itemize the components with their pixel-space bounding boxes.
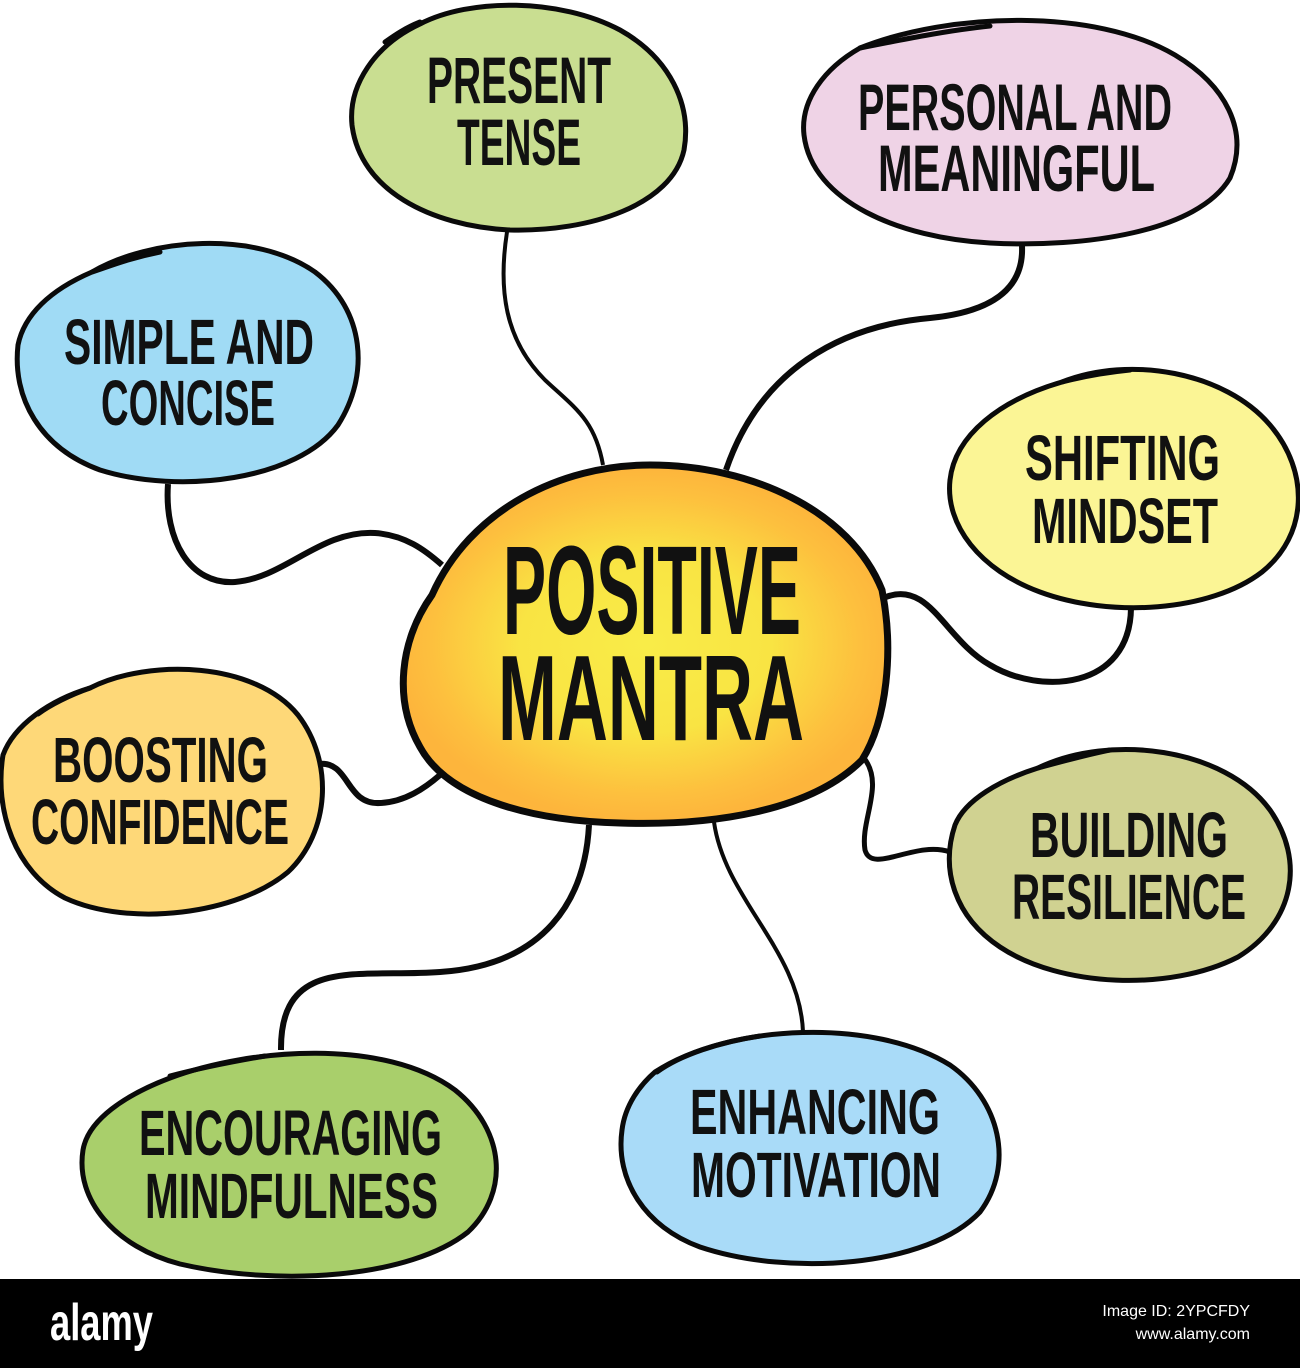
logo: alamy: alamy	[50, 1294, 153, 1352]
connector: enhancing motivation	[714, 822, 803, 1032]
node: boosting confidence	[1, 669, 322, 914]
node: personal and meaningful	[804, 20, 1237, 244]
label: boosting confidence: CONFIDENCE	[31, 786, 289, 858]
connector: simple and concise	[168, 484, 442, 582]
label: encouraging mindfulness: ENCOURAGING	[139, 1097, 442, 1169]
connector: personal and meaningful	[726, 246, 1022, 470]
label: encouraging mindfulness	[139, 1097, 442, 1232]
node: encouraging mindfulness	[82, 1053, 496, 1276]
connector: building resilience	[864, 758, 950, 859]
node: shifting mindset	[950, 369, 1298, 608]
node: enhancing motivation	[621, 1032, 999, 1264]
node: present tense	[352, 5, 686, 230]
image id: Image ID: 2YPCFDY	[1102, 1303, 1250, 1320]
label: simple and concise: SIMPLE AND	[64, 306, 314, 378]
label: encouraging mindfulness: MINDFULNESS	[145, 1160, 438, 1232]
label: positive mantra	[498, 520, 804, 766]
label: simple and concise	[64, 306, 314, 439]
connector: boosting confidence	[318, 764, 440, 803]
node: building resilience	[949, 749, 1290, 980]
label: positive mantra: POSITIVE	[503, 520, 801, 661]
website: www.alamy.com	[1135, 1326, 1250, 1343]
label: enhancing motivation: ENHANCING	[690, 1076, 940, 1148]
label: personal and meaningful	[858, 70, 1172, 205]
label: boosting confidence: BOOSTING	[53, 724, 268, 796]
label: simple and concise: CONCISE	[101, 367, 275, 439]
label: present tense	[427, 43, 611, 179]
connector: present tense	[504, 232, 603, 465]
label: present tense: TENSE	[457, 105, 581, 179]
footer bar	[0, 1279, 1300, 1368]
label: present tense: PRESENT	[427, 43, 611, 117]
connector: shifting mindset	[886, 594, 1131, 682]
connector: encouraging mindfulness	[281, 825, 589, 1050]
label: positive mantra: MANTRA	[498, 630, 804, 766]
node: center positive mantra	[403, 465, 888, 823]
node: simple and concise	[17, 243, 358, 482]
label: enhancing motivation: MOTIVATION	[691, 1139, 941, 1211]
label: boosting confidence	[31, 724, 289, 858]
label: enhancing motivation	[690, 1076, 941, 1211]
label: shifting mindset	[1025, 422, 1220, 557]
label: building resilience	[1012, 799, 1246, 933]
